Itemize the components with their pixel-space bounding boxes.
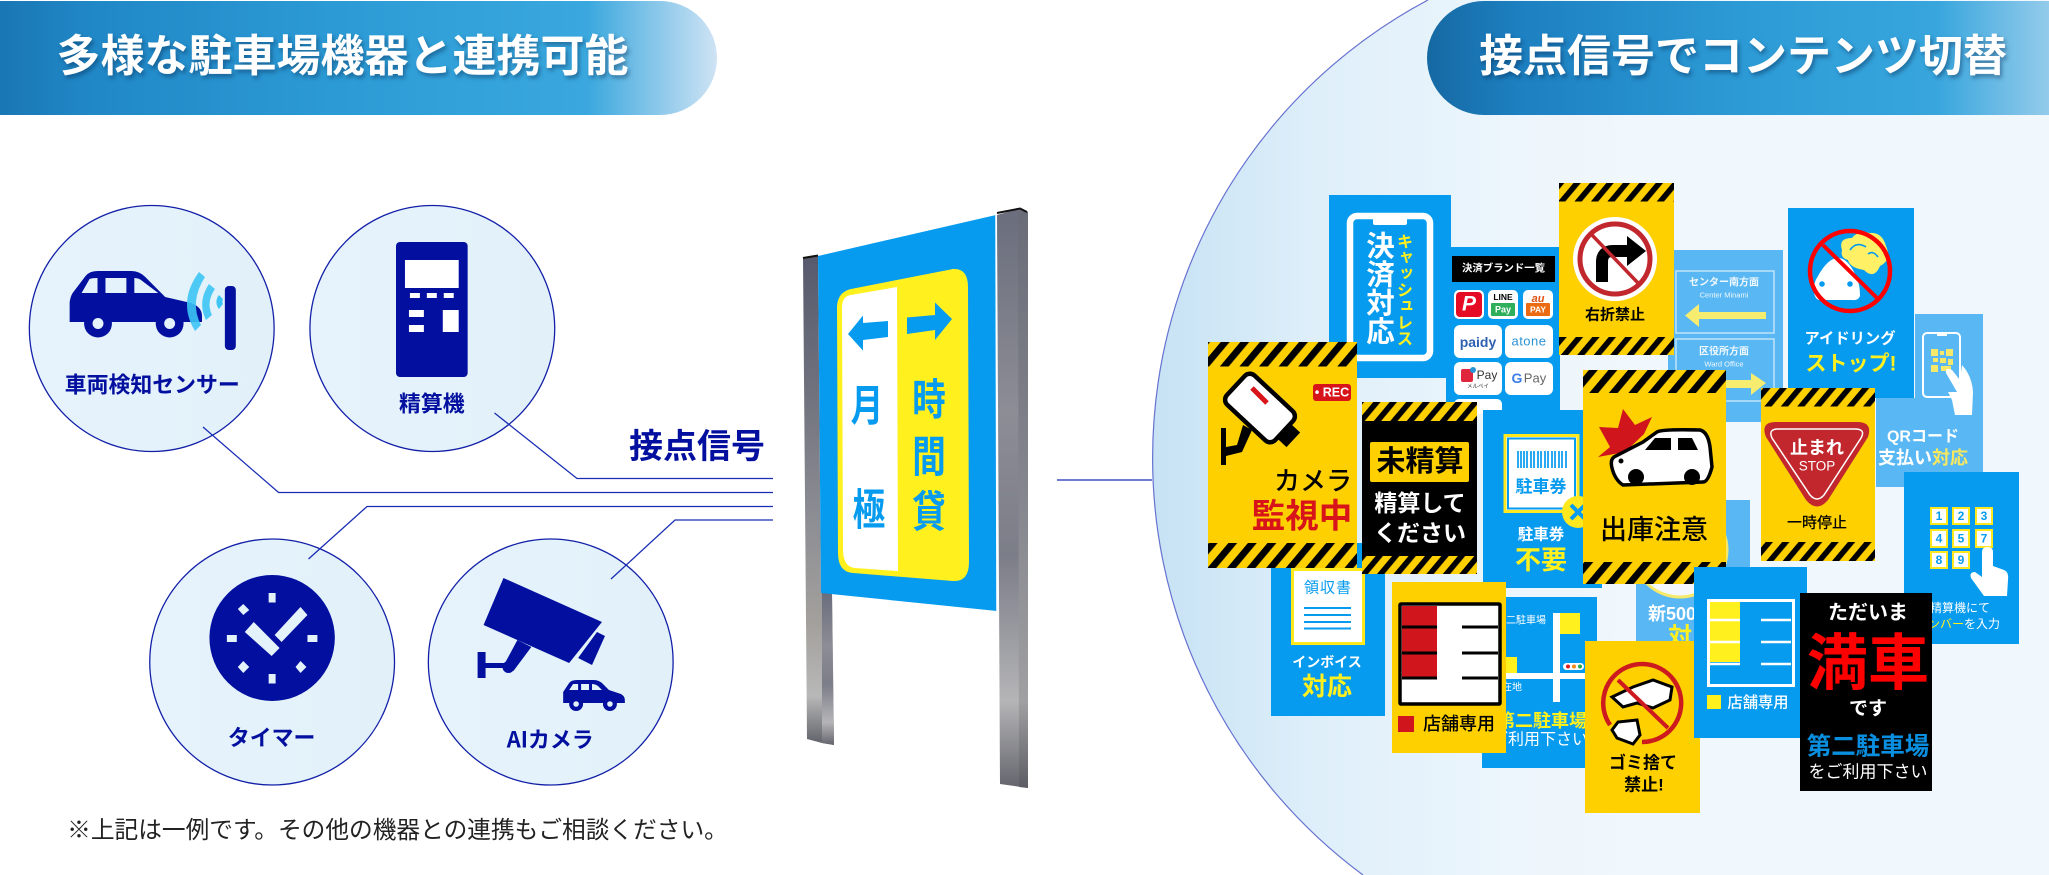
label: 車両検知センサー <box>65 372 240 398</box>
sign: direction guide: 区役所方面 <box>1699 344 1749 358</box>
sign: new 500 yen <box>1633 500 1750 672</box>
LINE Pay logo: Pay <box>1495 304 1511 314</box>
sign: parking ticket not required: 不要 <box>1515 545 1567 575</box>
sign: receipt invoice: 領収書 <box>1304 580 1352 596</box>
sign: stop <box>1761 388 1875 561</box>
Google Pay logo <box>1505 362 1553 395</box>
sign: keypad number entry: 7 <box>1981 532 1988 546</box>
sign: camera monitoring: カメラ <box>1274 466 1352 496</box>
sign: full lot: 第二駐車場 <box>1807 732 1929 760</box>
sign: camera monitoring: • REC <box>1315 386 1349 400</box>
label: contact signal: 接点信号 <box>629 428 765 466</box>
sign: parking ticket not required: 駐車券 <box>1518 524 1565 544</box>
sign: keypad number entry: 5 <box>1958 532 1965 546</box>
sign: store only red <box>1392 582 1506 753</box>
sign: full lot: をご利用下さい <box>1808 762 1928 782</box>
sign: keypad number entry: 4 <box>1936 532 1943 546</box>
atone logo: atone <box>1511 334 1547 348</box>
au PAY logo: PAY <box>1530 304 1546 314</box>
sign: stop: STOP <box>1799 458 1835 474</box>
right banner heading <box>1427 1 2049 115</box>
paidy logo <box>1454 325 1502 358</box>
sign: second parking lot map <box>1482 597 1597 768</box>
Google Pay logo: Pay <box>1524 370 1547 386</box>
sign: parking ticket not required <box>1483 410 1602 588</box>
sign: second parking lot map: 現在地 <box>1492 680 1522 694</box>
sign: direction guide: Center Minami <box>1700 290 1749 300</box>
sign: direction guide: センター南方面 <box>1689 276 1759 288</box>
icon: surveillance camera <box>478 578 625 711</box>
icon: payment machine <box>396 242 468 377</box>
sign: store only red: 店舗専用 <box>1423 714 1495 734</box>
sign: QR code payment: QRコード <box>1887 428 1959 446</box>
left banner heading <box>0 1 717 115</box>
sign: full lot: 満車 <box>1807 629 1929 697</box>
sign: store only blue: 店舗専用 <box>1727 694 1789 712</box>
panel text: 間 <box>912 434 946 482</box>
sign: idling stop: ストップ! <box>1806 352 1896 376</box>
sign: keypad number entry: 9 <box>1958 553 1965 567</box>
icon: car with sensor <box>70 271 236 350</box>
sign: second parking lot map: 第二駐車場 <box>1497 710 1587 731</box>
sign: direction guide <box>1668 250 1783 422</box>
sign: second parking lot map: 第二駐車場 <box>1496 614 1546 626</box>
sign: keypad number entry: 1 <box>1936 509 1943 523</box>
arrow: left <box>848 316 888 351</box>
sign: no littering <box>1585 641 1700 813</box>
sign: keypad number entry: 8 <box>1936 553 1943 567</box>
post: right <box>997 208 1028 788</box>
circle: timer <box>150 539 395 785</box>
PayPay logo <box>1454 290 1484 319</box>
label: AIカメラ <box>506 723 594 755</box>
sign: receipt invoice <box>1271 543 1385 716</box>
au PAY logo: au <box>1532 293 1545 305</box>
panel text: 極 <box>853 487 885 535</box>
sign: direction guide: Ward Office <box>1704 360 1744 368</box>
sign: exit caution: 出庫注意 <box>1600 515 1708 545</box>
yellow plate <box>837 269 969 581</box>
label: 精算機 <box>399 391 465 417</box>
sign: unpaid <box>1362 402 1477 574</box>
arrow: right <box>907 302 952 340</box>
sign: unpaid: ください <box>1374 520 1466 546</box>
post: left <box>803 256 834 745</box>
sign: cashless: キャッシュレス <box>1394 233 1412 346</box>
Google Pay logo: G <box>1512 370 1523 386</box>
sign: store only blue <box>1694 567 1807 738</box>
sign: QR code payment <box>1876 314 1983 487</box>
left banner heading: 多様な駐車場機器と連携可能 <box>56 32 628 81</box>
sign: no right turn <box>1559 183 1674 355</box>
merpay logo <box>1454 362 1502 395</box>
sign: keypad number entry <box>1904 472 2019 644</box>
label: タイマー <box>228 725 315 751</box>
sign: QR code payment: 支払い対応 <box>1878 448 1968 468</box>
sign: cashless: 決済対応 <box>1362 231 1394 345</box>
panel text: 月 <box>851 383 883 431</box>
sign: second parking lot map: ご利用下さい <box>1492 730 1588 748</box>
sign: new 500 yen: 新500円 <box>1648 604 1714 624</box>
sign: no littering: 禁止! <box>1624 774 1664 794</box>
sign: parking ticket not required: 駐車券 <box>1516 476 1566 496</box>
connector lines <box>203 413 1152 579</box>
sign: stop: 止まれ <box>1790 438 1844 458</box>
circle: payment machine <box>310 206 555 452</box>
sign: keypad number entry: 2 <box>1958 509 1965 523</box>
sign: keypad number entry: ナンバーを入力 <box>1916 617 2000 631</box>
sign: idling stop: アイドリング <box>1804 330 1896 348</box>
circle: vehicle detection sensor <box>29 206 274 452</box>
sign: idling stop <box>1788 208 1914 398</box>
atone logo <box>1505 325 1553 358</box>
background: large light-blue circle <box>1153 0 2049 875</box>
merpay logo: Pay <box>1477 368 1497 382</box>
sign: full lot: ただいま <box>1828 602 1908 624</box>
au PAY logo <box>1523 290 1553 319</box>
panel text: 時 <box>912 377 946 425</box>
paidy logo: paidy <box>1460 334 1496 350</box>
sign: keypad number entry: 精算機にて <box>1930 600 1990 615</box>
sign: unpaid: 精算して <box>1374 490 1466 516</box>
sign: payment brands: 決済ブランド一覧 <box>1462 262 1546 274</box>
panel text <box>851 377 946 537</box>
sign: unpaid: 未精算 <box>1376 445 1464 478</box>
sign: new 500 yen: 対応 <box>1668 624 1716 650</box>
icon: small car <box>563 680 625 703</box>
white half <box>842 287 898 571</box>
sign: exit caution <box>1583 370 1726 584</box>
sign: receipt invoice: インボイス <box>1292 654 1362 670</box>
sign: no littering: ゴミ捨て <box>1609 752 1677 772</box>
note: ※上記は一例です。その他の機器との連携もご相談ください。 <box>67 817 728 844</box>
signpost <box>803 208 1028 788</box>
sign: camera monitoring <box>1208 342 1357 568</box>
sign: full lot: です <box>1849 698 1887 720</box>
PayPay logo: P <box>1462 292 1477 316</box>
sign: no right turn: 右折禁止 <box>1585 306 1645 324</box>
merpay logo: メルペイ <box>1467 383 1489 390</box>
panel <box>818 215 997 611</box>
sign: stop: 一時停止 <box>1787 514 1847 532</box>
LINE Pay logo: LINE <box>1493 292 1513 302</box>
sign: cashless <box>1329 195 1451 378</box>
sign: camera monitoring: 監視中 <box>1252 498 1352 536</box>
sign: receipt invoice: 対応 <box>1302 673 1352 701</box>
icon: clock <box>209 575 335 701</box>
LINE Pay logo <box>1488 290 1518 319</box>
panel text: 貸 <box>912 489 946 537</box>
right banner heading: 接点信号でコンテンツ切替 <box>1479 32 2007 81</box>
sign: payment brands <box>1446 247 1560 414</box>
sign: keypad number entry: 3 <box>1981 509 1988 523</box>
sign: full lot <box>1800 593 1932 791</box>
circle: AI camera <box>428 539 673 785</box>
